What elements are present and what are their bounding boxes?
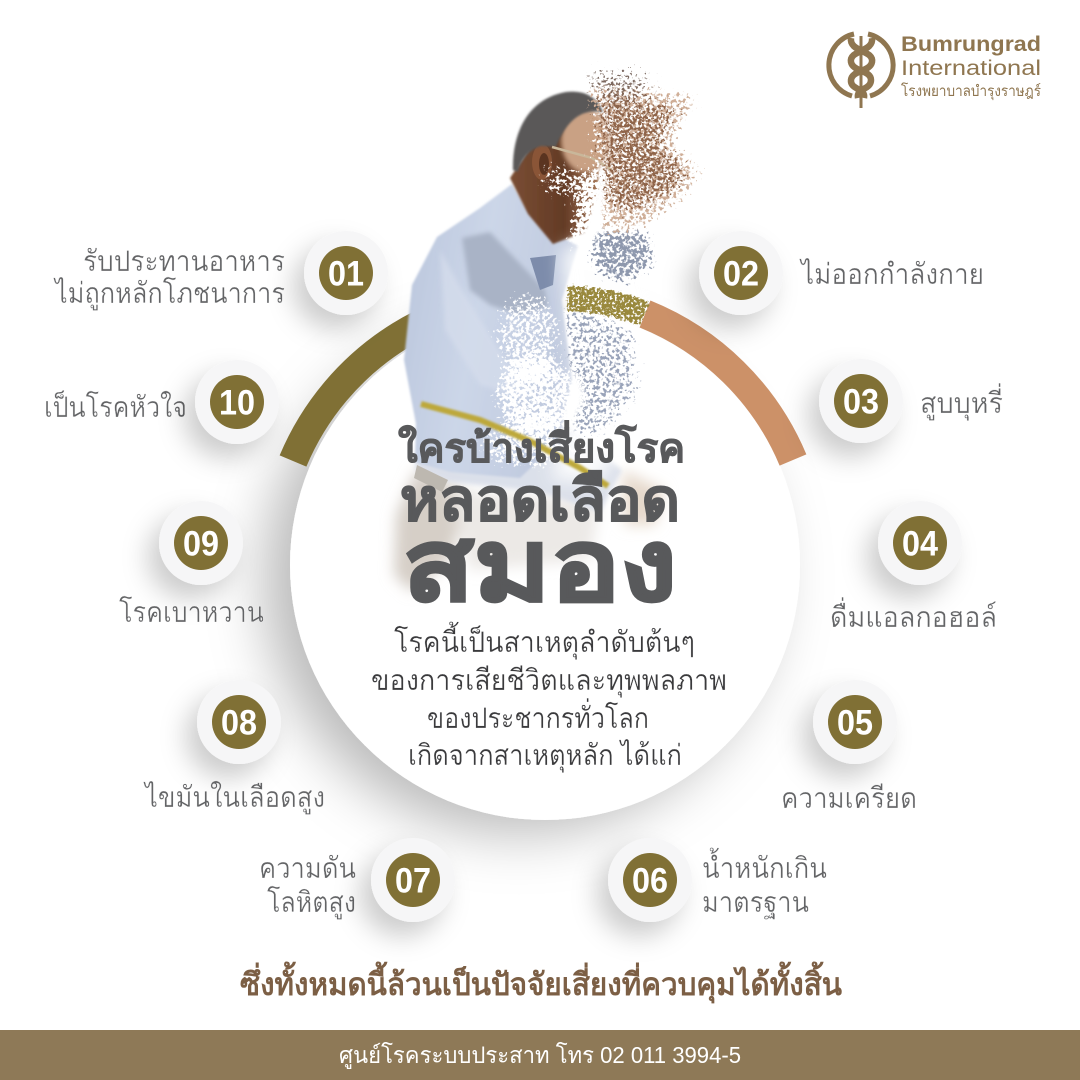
- belt: [414, 465, 448, 492]
- arc: left gold section: [293, 295, 560, 461]
- description text: [371, 621, 727, 773]
- hair: [513, 92, 603, 172]
- item 02: [699, 231, 984, 315]
- item 06: 06: [632, 862, 668, 900]
- description text: ของประชากรทั่วโลก: [427, 698, 649, 735]
- item 09: โรคเบาหวาน: [119, 595, 264, 629]
- glasses: [552, 147, 612, 170]
- item 07: 07: [395, 862, 431, 900]
- logo: Bumrungrad International: โรงพยาบาลบำรุงราษฎร์: [901, 82, 1041, 101]
- logo: Bumrungrad International: International: [901, 57, 1041, 80]
- title line 3: สมอง: [403, 510, 677, 622]
- heading: [398, 420, 685, 622]
- description text: โรคนี้เป็นสาเหตุลำดับต้นๆ: [394, 621, 695, 660]
- item 08: ไขมันในเลือดสูง: [143, 780, 325, 815]
- item 05: ความเครียด: [781, 783, 917, 815]
- lower shirt fading: [415, 420, 622, 512]
- description text: เกิดจากสาเหตุหลัก ได้แก่: [408, 738, 682, 773]
- trousers: [394, 470, 664, 592]
- footer bar: [0, 1030, 1080, 1080]
- item 04: [830, 501, 997, 634]
- title line 2: หลอดเลือด: [400, 468, 680, 533]
- grey-blue particles: [560, 225, 660, 440]
- tie: [530, 255, 556, 290]
- head dispersing into light tan particles: [585, 80, 708, 240]
- item 09: 09: [183, 524, 219, 564]
- item 08: [143, 680, 325, 815]
- item 07: ความดัน: [259, 853, 356, 885]
- item 05: 05: [837, 704, 873, 742]
- item 01: รับประทานอาหาร: [83, 246, 285, 278]
- item 04: ดื่มแอลกอฮอล์: [830, 597, 997, 634]
- item 03: [819, 359, 1003, 443]
- sleeve shading: [462, 232, 548, 315]
- item 02: 02: [723, 254, 759, 294]
- description text: ของการเสียชีวิตและทุพพลภาพ: [371, 665, 727, 698]
- item 07: โลหิตสูง: [267, 885, 356, 920]
- neck and face: [510, 110, 600, 244]
- arc: gold section dissolving: [566, 298, 646, 314]
- photo: elderly man dissolving into particles: [394, 66, 708, 592]
- arc: peach section: [645, 314, 793, 460]
- item 08: 08: [221, 704, 257, 742]
- closing statement: ซึ่งทั้งหมดนี้ล้วนเป็นปัจจัยเสี่ยงที่ควบคุมได้ทั้งสิ้น: [240, 961, 842, 1004]
- item 10: [44, 360, 279, 444]
- forehead: [561, 108, 609, 172]
- waist measuring tape: [421, 404, 608, 486]
- item 06: น้ำหนักเกิน: [702, 847, 827, 885]
- item 06: มาตรฐาน: [702, 887, 809, 920]
- item 01: 01: [328, 254, 364, 294]
- white dissolve haze: [552, 225, 655, 480]
- item 03: 03: [843, 382, 879, 422]
- item 01: [53, 231, 388, 315]
- item 09: [119, 501, 264, 629]
- shirt: [404, 184, 578, 478]
- logo: Bumrungrad International: [829, 33, 1041, 108]
- arm highlight: [440, 250, 530, 400]
- item 10: 10: [219, 384, 255, 422]
- item 04: 04: [902, 524, 938, 564]
- title line 1: ใครบ้างเสี่ยงโรค: [398, 420, 685, 471]
- item 10: เป็นโรคหัวใจ: [44, 389, 187, 424]
- item 03: สูบบุหรี่: [920, 383, 1003, 421]
- item 07: [259, 838, 455, 922]
- item 01: ไม่ถูกหลักโภชนาการ: [53, 276, 285, 311]
- white speckle over head, face and shirt: [475, 110, 612, 471]
- logo wordmark: Bumrungrad: [901, 33, 1041, 56]
- head dispersing into brown particles: [572, 66, 700, 222]
- central white disc: [290, 310, 800, 820]
- item 05: [781, 680, 917, 815]
- item 02: ไม่ออกกำลังกาย: [799, 257, 984, 291]
- item 06: [608, 838, 827, 922]
- ear: [532, 144, 552, 180]
- footer bar: ศูนย์โรคระบบประสาท โทร 02 011 3994-5: [339, 1042, 741, 1069]
- logo emblem: [829, 34, 893, 108]
